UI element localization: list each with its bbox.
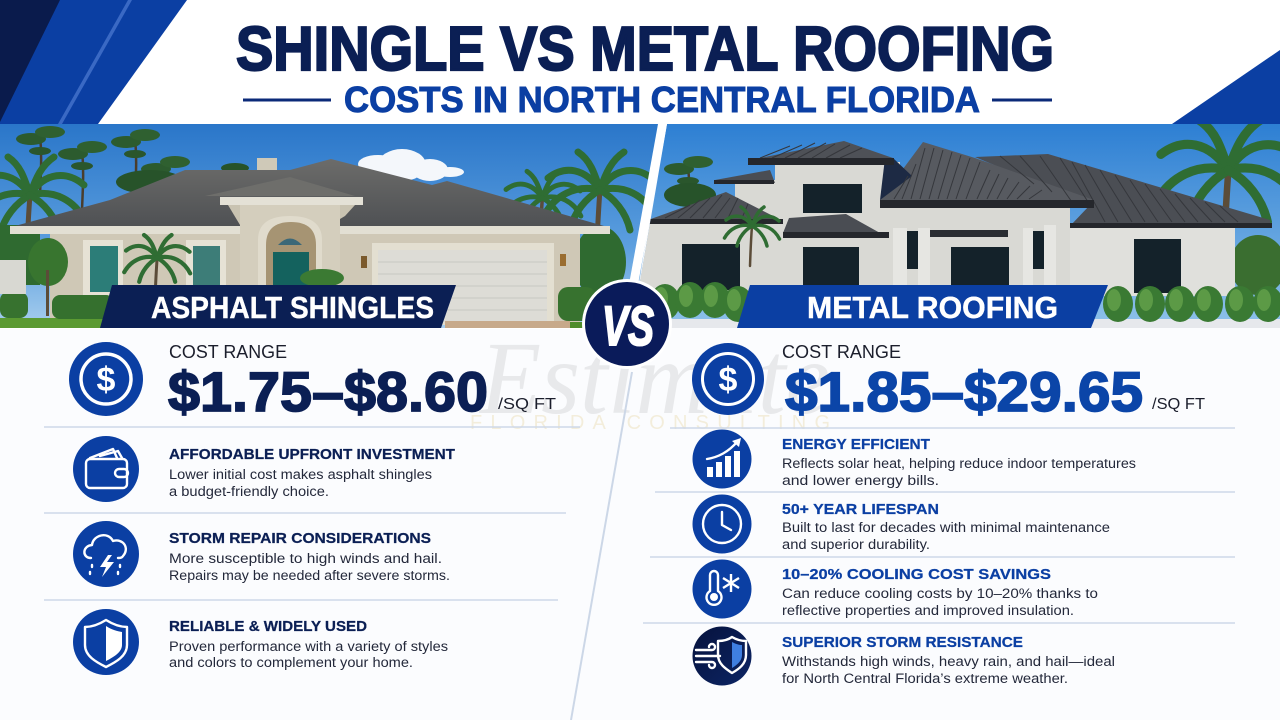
cost range: asphalt: /SQ FT: [498, 396, 556, 413]
VS badge: VS: [602, 294, 654, 357]
item: energy efficient: [692, 430, 1136, 488]
icon: dollar coin: $: [719, 361, 738, 399]
item: 50+ year lifespan: Built to last for decades with minimal maintenance: [782, 520, 1110, 535]
item: storm repair considerations: Repairs may be needed after severe storms.: [169, 568, 450, 583]
icon: dollar coin: [69, 342, 143, 416]
windows and doors: [682, 184, 1181, 293]
item: affordable upfront investment: AFFORDABLE UPFRONT INVESTMENT: [169, 446, 455, 463]
item: cooling cost savings: Can reduce cooling costs by 10–20% thanks to: [782, 586, 1098, 601]
photo: metal roof house: [632, 121, 1280, 329]
icon: rising bar chart: [692, 430, 752, 488]
background trees: [0, 126, 655, 298]
icon: storm cloud: [73, 521, 139, 587]
panel: metal roofing details: [643, 342, 1235, 686]
entry arch: [240, 205, 340, 285]
roof: [15, 159, 604, 226]
cost range: metal: $1.85–$29.65: [785, 360, 1143, 423]
item: cooling cost savings: 10–20% COOLING COST SAVINGS: [782, 566, 1051, 583]
item: cooling cost savings: [692, 560, 1098, 618]
item: storm repair considerations: More susceptible to high winds and hail.: [169, 551, 442, 566]
garage: [361, 243, 566, 325]
corner accent: top left: [0, 0, 187, 124]
cost range: metal: [782, 342, 1205, 423]
item: energy efficient: and lower energy bills.: [782, 473, 939, 488]
item: reliable and widely used: Proven performance with a variety of styles: [169, 639, 448, 654]
banner: asphalt shingles: ASPHALT SHINGLES: [151, 290, 434, 325]
banner: asphalt shingles: [100, 285, 456, 328]
windows: [83, 240, 226, 296]
item: reliable and widely used: RELIABLE & WIDELY USED: [169, 618, 367, 635]
landscaping: [632, 282, 1280, 329]
item: 50+ year lifespan: and superior durability.: [782, 537, 930, 552]
item: storm repair considerations: [73, 521, 450, 587]
eaves: [10, 226, 252, 234]
icon: wind and shield: [692, 626, 752, 686]
item: reliable and widely used: and colors to complement your home.: [169, 655, 413, 670]
icon: thermometer with snowflake: [692, 560, 752, 618]
item: affordable upfront investment: Lower initial cost makes asphalt shingles: [169, 467, 432, 482]
subtitle: COSTS IN NORTH CENTRAL FLORIDA: [344, 79, 980, 120]
background trees: [664, 121, 1280, 295]
item: affordable upfront investment: a budget-friendly choice.: [169, 484, 329, 499]
title: SHINGLE VS METAL ROOFING: [236, 15, 1054, 84]
item: cooling cost savings: reflective properties and improved insulation.: [782, 603, 1074, 618]
palm: [724, 207, 780, 266]
cost range: metal: COST RANGE: [782, 342, 901, 362]
item: superior storm resistance: [692, 626, 1115, 686]
icon: dollar coin: [692, 343, 764, 415]
item: superior storm resistance: for North Central Florida’s extreme weather.: [782, 671, 1068, 686]
header banner: [0, 0, 1280, 125]
walls: [640, 162, 1235, 296]
item: energy efficient: Reflects solar heat, helping reduce indoor temperatures: [782, 456, 1136, 471]
watermark: Estimate: [478, 321, 830, 436]
walls: [50, 232, 580, 324]
item: reliable and widely used: [73, 609, 448, 675]
metal roofs: [648, 141, 1272, 238]
item: 50+ year lifespan: [692, 494, 1110, 554]
icon: wallet: [73, 436, 139, 502]
panel: asphalt shingles details: [44, 342, 580, 675]
watermark: FLORIDA CONSULTING: [470, 412, 830, 434]
item: storm repair considerations: STORM REPAIR CONSIDERATIONS: [169, 530, 431, 547]
item: superior storm resistance: SUPERIOR STORM RESISTANCE: [782, 634, 1023, 651]
icon: dollar coin: $: [97, 361, 116, 399]
icon: shield: [73, 609, 139, 675]
landscaping: [0, 235, 620, 329]
VS badge: [582, 279, 672, 369]
item: energy efficient: ENERGY EFFICIENT: [782, 436, 930, 453]
banner: metal roofing: METAL ROOFING: [807, 290, 1058, 325]
photo: asphalt shingle house: [0, 124, 670, 329]
corner accent: top right: [1172, 50, 1280, 124]
center faint divider: [571, 372, 632, 720]
item: superior storm resistance: Withstands high winds, heavy rain, and hail—ideal: [782, 654, 1115, 669]
item: affordable upfront investment: [73, 436, 455, 502]
column highlights: [893, 225, 1056, 289]
banner: metal roofing: [737, 285, 1108, 328]
cost range: asphalt: $1.75–$8.60: [168, 360, 488, 423]
icon: clock: [692, 494, 752, 554]
chimney: [257, 158, 277, 170]
item: 50+ year lifespan: 50+ YEAR LIFESPAN: [782, 501, 939, 518]
cost range: asphalt: [168, 342, 556, 423]
cloud: [358, 149, 464, 181]
cost range: metal: /SQ FT: [1152, 396, 1205, 413]
diagonal divider between photos: [628, 124, 667, 290]
cost range: asphalt: COST RANGE: [169, 342, 287, 362]
